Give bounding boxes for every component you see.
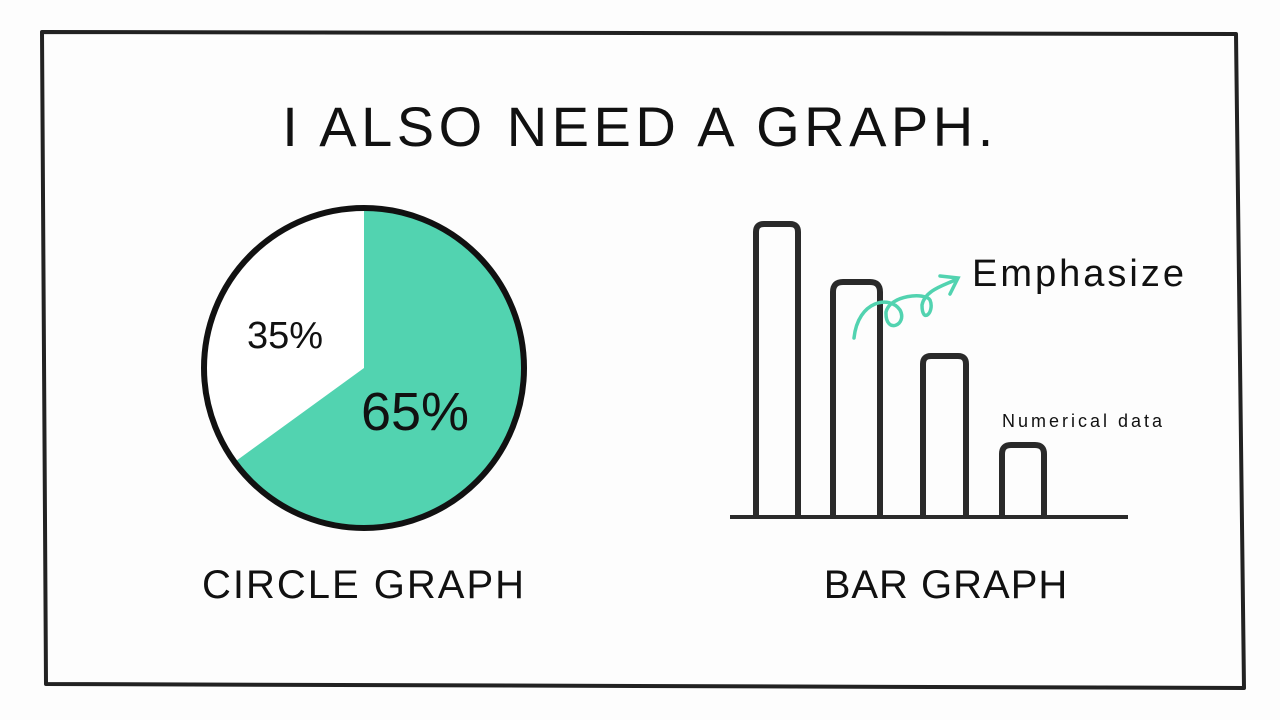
- circle graph caption: CIRCLE GRAPH: [202, 563, 526, 607]
- label 65%: 65%: [361, 382, 469, 442]
- bar graph: [730, 224, 1128, 517]
- label 35%: 35%: [247, 315, 323, 357]
- bar graph caption: BAR GRAPH: [824, 563, 1068, 607]
- circle graph: [204, 208, 524, 528]
- label: Emphasize: Emphasize: [972, 253, 1187, 295]
- title: I ALSO NEED A GRAPH.: [282, 95, 998, 158]
- emphasize arrow: [854, 276, 958, 338]
- label: Numerical data: Numerical data: [1002, 411, 1165, 431]
